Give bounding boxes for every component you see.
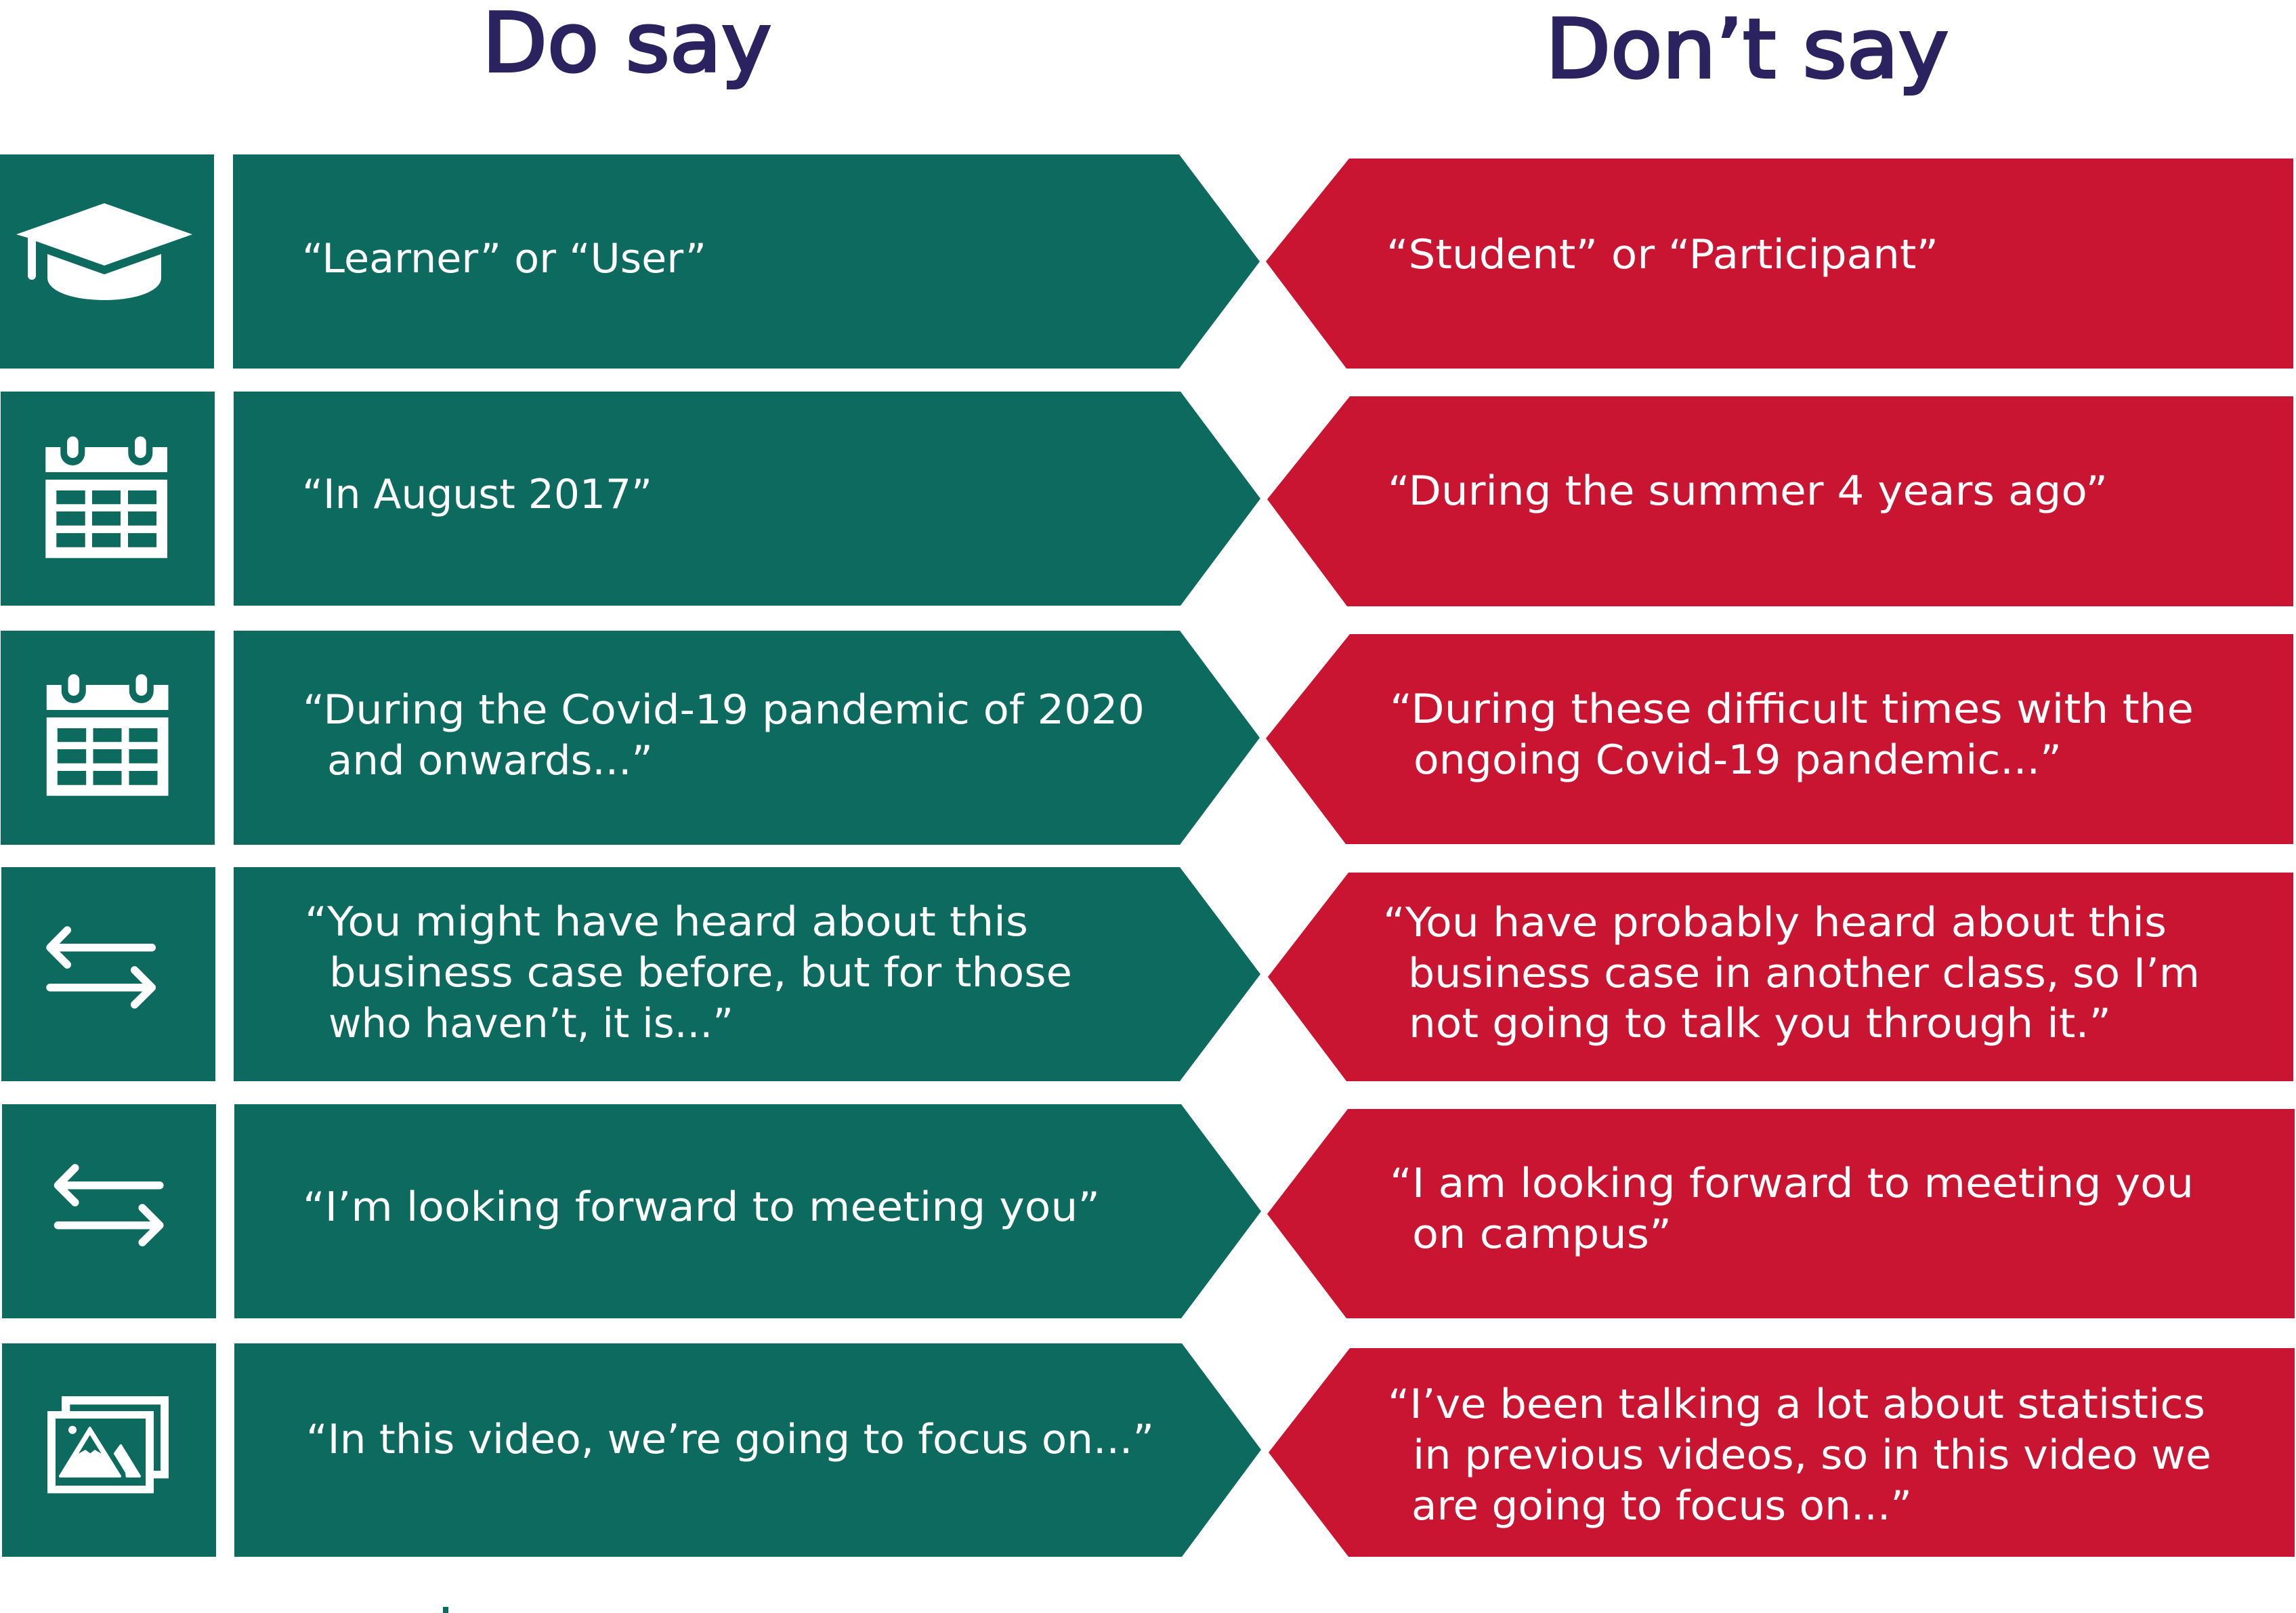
- don't say arrow: on campus: [1267, 1109, 2295, 1318]
- don't say arrow: student: “Student” or “Participant”: [1386, 231, 1938, 278]
- do say arrow: might have heard: who haven’t, it is...”: [328, 1000, 734, 1047]
- don't say arrow: on campus: “I am looking forward to meeting you: [1390, 1160, 2194, 1207]
- do say arrow: might have heard: [234, 867, 1260, 1081]
- don't say arrow: on campus: on campus”: [1412, 1211, 1672, 1258]
- do say arrow: looking forward: “I’m looking forward to meeting you”: [303, 1183, 1100, 1231]
- do say arrow: might have heard: business case before, but for those: [329, 949, 1072, 997]
- icon tile: calendar: [1, 392, 215, 606]
- don't say arrow: during the summer: “During the summer 4 years ago”: [1388, 467, 2108, 515]
- heading: Don't say: Don’t say: [1546, 3, 1949, 97]
- don't say arrow: probably heard: [1268, 873, 2293, 1081]
- do say arrow: learner: “Learner” or “User”: [302, 235, 706, 282]
- don't say arrow: previous videos: in previous videos, so in this video we: [1413, 1431, 2211, 1479]
- do say arrow: in this video: “In this video, we’re going to focus on...”: [306, 1416, 1154, 1463]
- don't say arrow: previous videos: are going to focus on...”: [1411, 1482, 1912, 1530]
- don't say arrow: probably heard: “You have probably heard about this: [1383, 899, 2167, 946]
- icon tile: calendar: [1, 631, 215, 845]
- row 3: covid wording: [1, 631, 2293, 845]
- icon tile: images: [2, 1343, 216, 1557]
- do say arrow: might have heard: “You might have heard about this: [305, 898, 1028, 946]
- don't say arrow: difficult times: “During these difficult times with the: [1390, 686, 2194, 733]
- don't say arrow: difficult times: ongoing Covid-19 pandemic...”: [1413, 736, 2062, 784]
- do say arrow: covid pandemic of 2020: and onwards...”: [327, 737, 653, 784]
- do say arrow: covid pandemic of 2020: “During the Covid-19 pandemic of 2020: [303, 686, 1145, 734]
- cropped mark at bottom edge: [443, 1607, 448, 1613]
- row 6: this video: [2, 1343, 2295, 1557]
- row 1: learner vs student: [0, 154, 2293, 369]
- don't say arrow: previous videos: “I’ve been talking a lot about statistics: [1388, 1381, 2205, 1428]
- do say arrow: in August 2017: [234, 392, 1260, 606]
- don't say arrow: probably heard: business case in another class, so I’m: [1408, 950, 2200, 997]
- don't say arrow: during the summer: [1267, 396, 2293, 606]
- do say arrow: covid pandemic of 2020: [234, 631, 1260, 845]
- do say arrow: looking forward: [234, 1104, 1261, 1318]
- don't say arrow: previous videos: [1269, 1348, 2295, 1557]
- do say arrow: in this video: [234, 1343, 1261, 1557]
- icon tile: two-way arrows: [1, 867, 215, 1081]
- row 2: date vs relative time: [1, 392, 2293, 606]
- don't say arrow: probably heard: not going to talk you through it.”: [1409, 1000, 2111, 1047]
- don't say arrow: student: [1266, 159, 2293, 369]
- icon tile: two-way arrows: [2, 1104, 216, 1318]
- row 4: heard about this case: [1, 867, 2293, 1081]
- don't say arrow: difficult times: [1266, 634, 2293, 844]
- icon tile: graduation cap: [0, 154, 214, 369]
- row 5: meeting you: [2, 1104, 2295, 1318]
- do say arrow: in August 2017: “In August 2017”: [302, 471, 652, 518]
- do say arrow: learner: [233, 154, 1260, 369]
